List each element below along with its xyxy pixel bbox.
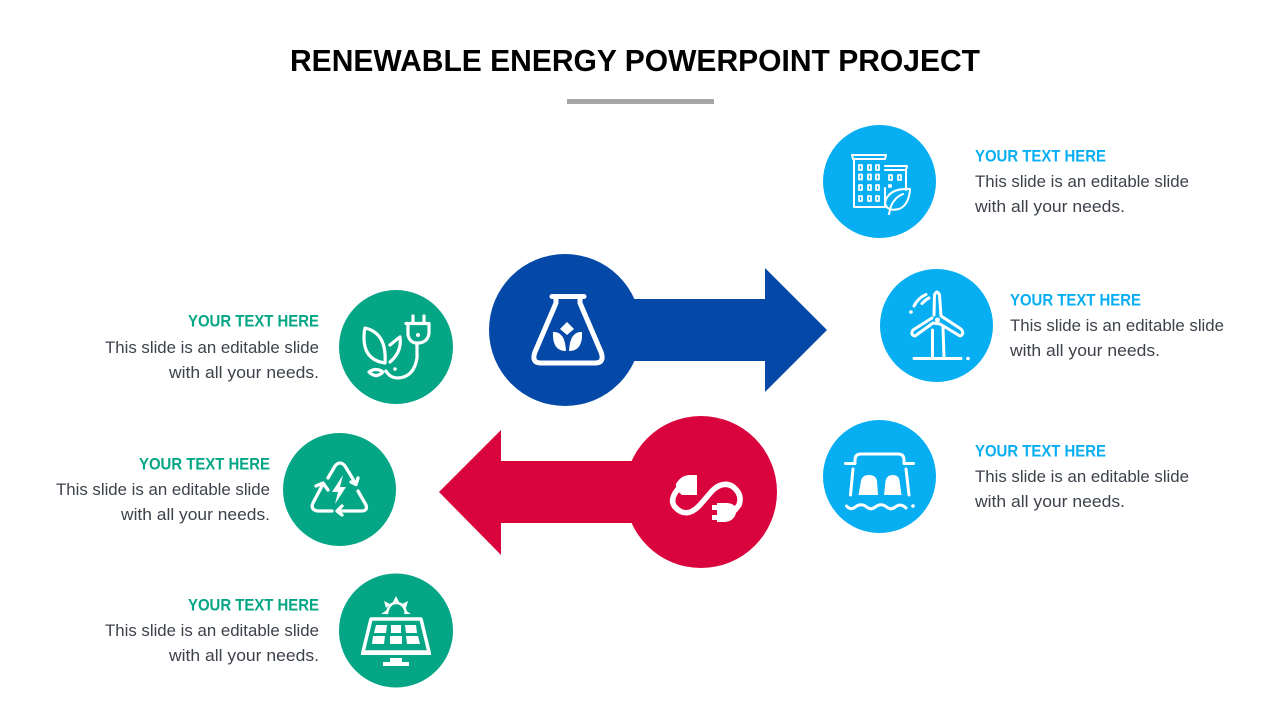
text block: YOUR TEXT HERE [188,312,319,330]
panel: hydro dam item [823,420,1189,533]
text block: YOUR TEXT HERE [1010,292,1141,310]
panel: solar panel item [105,574,453,688]
text block: YOUR TEXT HERE [975,148,1106,166]
panel: wind turbine item [880,269,1224,382]
title: RENEWABLE ENERGY POWERPOINT PROJECT [290,43,980,78]
icon: wind turbine [909,292,970,360]
icon: leaves and plug [364,316,429,378]
text block [1009,292,1224,360]
text block: YOUR TEXT HERE [188,596,319,614]
icon: dam [846,454,915,509]
panel: building item [823,125,1189,238]
text block: YOUR TEXT HERE [975,442,1106,460]
text block: with all your needs. [974,493,1125,511]
text block: with all your needs. [974,198,1125,216]
text block [974,442,1189,511]
text block [56,456,270,524]
panel: recycle energy item [56,433,396,546]
text block: This slide is an editable slide [975,468,1189,486]
text block: This slide is an editable slide [975,173,1189,191]
icon: eco building [852,155,910,214]
icon: recycle with bolt [312,463,366,515]
text block: YOUR TEXT HERE [139,456,270,474]
text block [105,596,319,665]
blue arrow with flask icon [489,254,827,406]
text block [974,148,1189,216]
text block [105,312,319,382]
text block: This slide is an editable slide [105,622,319,640]
text block: with all your needs. [168,647,319,665]
text block: This slide is an editable slide [56,481,270,499]
text block: This slide is an editable slide [1010,317,1224,335]
text block: with all your needs. [1009,342,1160,360]
text block: This slide is an editable slide [105,339,319,357]
text block: with all your needs. [168,364,319,382]
panel: plant plug item [105,290,453,404]
icon: flask with leaves [534,296,602,363]
text block: with all your needs. [120,506,270,524]
red arrow with plug icon [439,416,777,568]
icon: solar panel [361,596,431,666]
icon: plug cable [673,475,740,522]
